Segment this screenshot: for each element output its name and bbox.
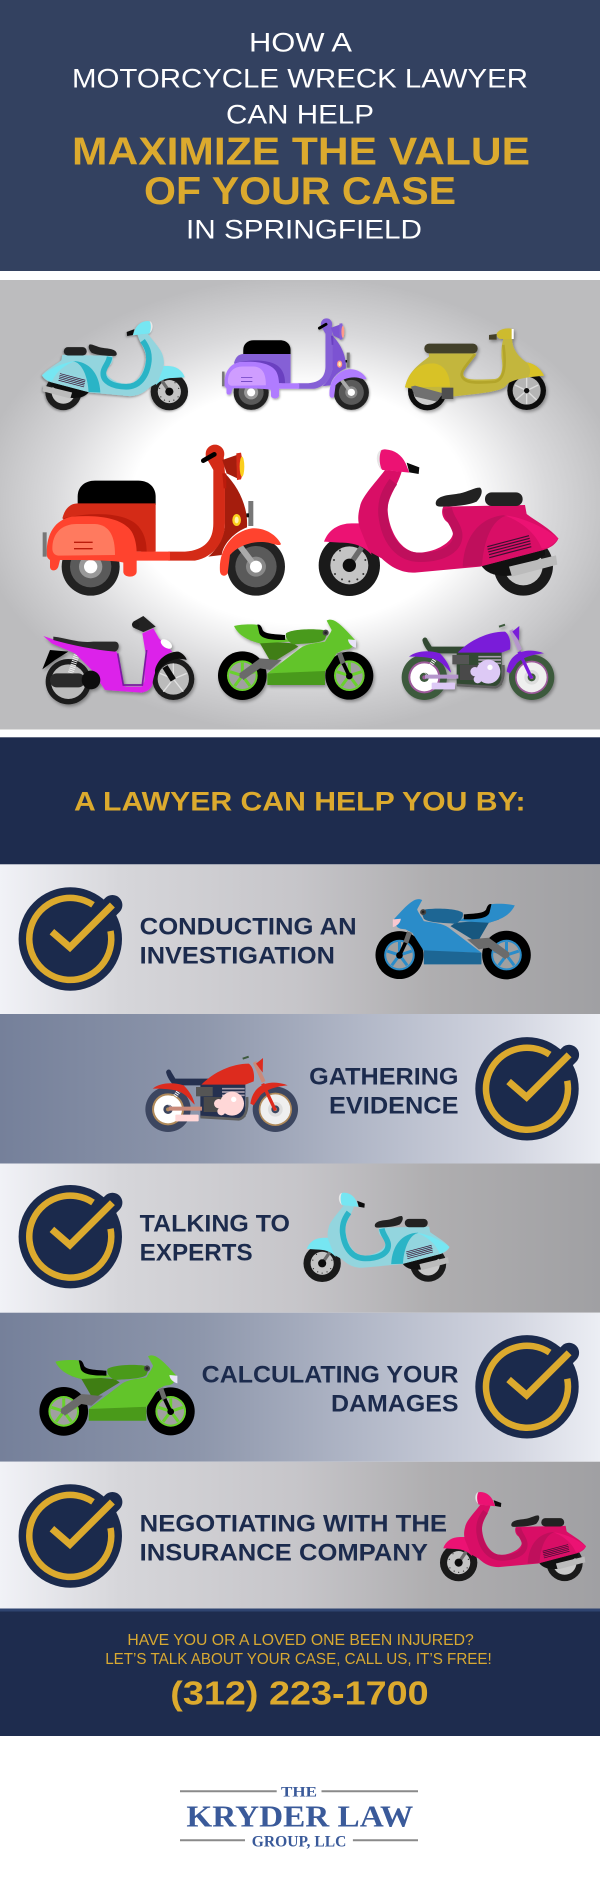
check icon bbox=[19, 1484, 122, 1588]
logo: the kryder law group bbox=[180, 1785, 418, 1851]
label: CONDUCTING AN bbox=[140, 914, 357, 941]
panel: motorcycle collection bbox=[0, 280, 600, 730]
logo: the kryder law group: GROUP, LLC bbox=[252, 1834, 346, 1851]
purple cruiser bbox=[402, 625, 554, 700]
label: DAMAGES bbox=[331, 1391, 458, 1418]
check icon bbox=[19, 887, 122, 991]
title: IN SPRINGFIELD bbox=[186, 215, 422, 245]
label: INVESTIGATION bbox=[140, 943, 335, 970]
label: CALCULATING YOUR bbox=[202, 1362, 458, 1389]
header panel bbox=[0, 0, 600, 271]
label: GATHERING bbox=[309, 1064, 458, 1091]
red cruiser bbox=[145, 1057, 298, 1132]
row: talking to experts bbox=[0, 1164, 600, 1313]
check icon bbox=[19, 1185, 122, 1288]
title: OF YOUR CASE bbox=[144, 170, 456, 213]
section heading band bbox=[0, 737, 600, 864]
label bbox=[140, 1511, 447, 1567]
green sport bike bbox=[39, 1355, 195, 1436]
call to action text: HAVE YOU OR A LOVED ONE BEEN INJURED? bbox=[127, 1632, 474, 1649]
pink scooter bbox=[440, 1492, 586, 1581]
call to action footer bbox=[0, 1608, 600, 1736]
title: MAXIMIZE THE VALUE bbox=[72, 131, 530, 174]
heading: A LAWYER CAN HELP YOU BY: bbox=[74, 787, 526, 817]
red scooter bbox=[43, 445, 285, 596]
magenta scooter bbox=[42, 616, 194, 704]
row: gathering evidence bbox=[0, 1014, 600, 1164]
row: calculating your damages bbox=[0, 1313, 600, 1462]
label: INSURANCE COMPANY bbox=[140, 1540, 428, 1567]
pink scooter bbox=[319, 449, 558, 596]
title bbox=[72, 28, 530, 245]
label bbox=[309, 1064, 458, 1120]
check icon bbox=[475, 1037, 579, 1140]
row: conducting an investigation bbox=[0, 864, 600, 1014]
call to action text bbox=[105, 1632, 492, 1668]
check icon bbox=[475, 1335, 579, 1438]
label bbox=[140, 1211, 290, 1267]
blue sport bike bbox=[375, 899, 531, 979]
label bbox=[202, 1362, 458, 1418]
label: EVIDENCE bbox=[329, 1093, 458, 1120]
label bbox=[140, 914, 357, 970]
label: EXPERTS bbox=[140, 1240, 253, 1267]
logo: the kryder law group: KRYDER LAW bbox=[186, 1799, 413, 1834]
label: TALKING TO bbox=[140, 1211, 290, 1238]
row: negotiating with the insurance company bbox=[0, 1462, 600, 1609]
logo: the kryder law group: THE bbox=[281, 1785, 317, 1801]
yellow scooter bbox=[405, 328, 546, 410]
title: HOW A bbox=[249, 28, 352, 58]
call to action text: LET’S TALK ABOUT YOUR CASE, CALL US, IT’S FREE! bbox=[105, 1651, 492, 1668]
title: CAN HELP bbox=[226, 100, 374, 130]
teal scooter bbox=[42, 321, 188, 410]
label: NEGOTIATING WITH THE bbox=[140, 1511, 447, 1538]
teal scooter bbox=[303, 1193, 449, 1282]
purple scooter bbox=[222, 318, 369, 410]
phone number: (312) 223-1700 bbox=[170, 1674, 429, 1711]
green sport bike bbox=[218, 620, 373, 700]
title: MOTORCYCLE WRECK LAWYER bbox=[72, 64, 528, 94]
